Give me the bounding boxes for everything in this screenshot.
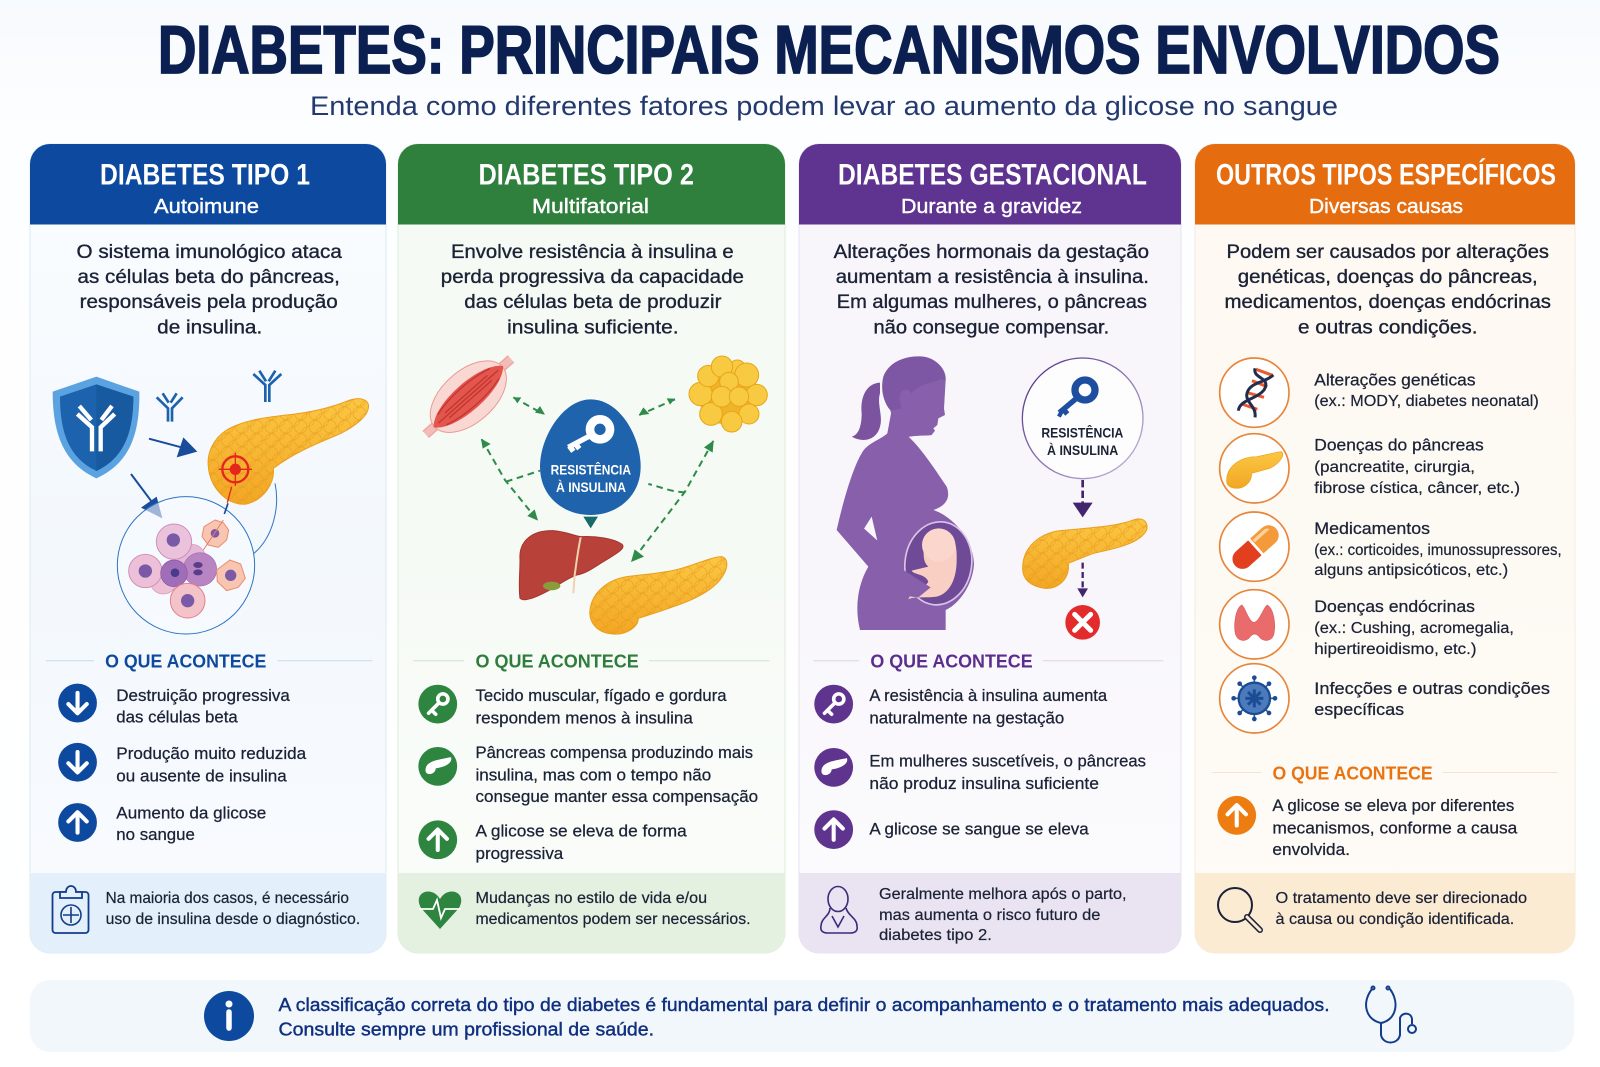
callout text: Consulte sempre um profissional de saúde. [279, 1019, 654, 1040]
item: pâncreas não produz: Em mulheres suscetíveis, o pâncreas [869, 752, 1146, 770]
callout text [279, 994, 1330, 1040]
illustration: autoimmune attack on pancreas [53, 371, 369, 634]
item: aumento da glicose: no sangue [116, 826, 195, 844]
icon: stethoscope [1366, 986, 1416, 1042]
item: pâncreas compensa: insulina, mas com o tempo não [476, 767, 711, 785]
header: gestacional: DIABETES GESTACIONAL [838, 158, 1147, 192]
description: tipo 2: das células beta de produzir [464, 291, 722, 313]
item text: medicamentos [1314, 520, 1562, 579]
footer: gestacional: Geralmente melhora após o parto, [879, 886, 1127, 903]
header: tipo 1: DIABETES TIPO 1 [100, 158, 310, 192]
illustration: pregnant woman and insulin resistance: À INSULINA [1047, 443, 1118, 458]
item: glicose se eleva: A glicose se eleva de forma [476, 823, 688, 841]
footer: gestacional: diabetes tipo 2. [879, 927, 992, 944]
header: tipo 2: DIABETES TIPO 2 [478, 158, 694, 192]
footer: tipo 1 [30, 873, 386, 953]
item: pâncreas compensa: consegue manter essa compensação [476, 788, 758, 806]
item text: doenças do pâncreas [1314, 437, 1520, 497]
section heading: o que acontece: O QUE ACONTECE [476, 650, 639, 671]
item: glicose se eleva: envolvida. [1272, 841, 1350, 859]
item: pâncreas não produz [814, 748, 1146, 793]
item text: medicamentos: alguns antipsicóticos, etc.) [1314, 562, 1508, 579]
description: outros tipos: genéticas, doenças do pâncreas, [1238, 266, 1538, 288]
item text: doenças do pâncreas: fibrose cística, câncer, etc.) [1314, 480, 1520, 497]
item: glicose se eleva: A glicose se sangue se eleva [869, 821, 1090, 839]
description: gestacional [834, 241, 1149, 339]
item: tecidos respondem menos [418, 685, 727, 727]
item: glicose se eleva [418, 820, 688, 863]
header: tipo 2 [398, 144, 785, 224]
description: outros tipos [1224, 241, 1551, 339]
header: outros tipos [1195, 144, 1575, 224]
item: produção reduzida: ou ausente de insulina [116, 768, 288, 786]
item: resistência aumenta: A resistência à insulina aumenta [869, 687, 1108, 705]
description: tipo 1 [77, 241, 342, 339]
icon: medicamentos [1220, 512, 1289, 581]
description: gestacional: não consegue compensar. [873, 317, 1109, 339]
subtitle: Entenda como diferentes fatores podem levar ao aumento da glicose no sangue [310, 91, 1338, 121]
panel: outros tipos específicos [1195, 144, 1575, 953]
item text: doenças endócrinas: hipertireoidismo, etc.) [1314, 641, 1477, 658]
item: tecidos respondem menos: respondem menos à insulina [476, 709, 694, 727]
item: aumento da glicose [58, 803, 266, 844]
item text: doenças endócrinas: (ex.: Cushing, acromegalia, [1314, 620, 1514, 637]
item: resistência aumenta [814, 685, 1108, 727]
header: gestacional [799, 144, 1181, 224]
item text: medicamentos: Medicamentos [1314, 520, 1430, 538]
item: destruição: das células beta [116, 708, 239, 726]
item text: doenças do pâncreas: (pancreatite, cirurgia, [1314, 459, 1475, 476]
description: outros tipos: Podem ser causados por alterações [1227, 241, 1549, 263]
section heading: o que acontece: O QUE ACONTECE [1272, 763, 1433, 784]
item: pâncreas compensa: Pâncreas compensa produzindo mais [476, 744, 753, 762]
item: pâncreas compensa [418, 744, 758, 806]
footer: outros tipos: O tratamento deve ser direcionado [1276, 890, 1527, 907]
description: tipo 2: Envolve resistência à insulina e [451, 241, 734, 263]
icon: vírus [1220, 664, 1289, 733]
panel: diabetes tipo 1 [30, 144, 386, 953]
footer: tipo 1: Na maioria dos casos, é necessário [106, 890, 349, 907]
callout text: A classificação correta do tipo de diabetes é fundamental para definir o acompanhamento e o tratamento mais adequados. [279, 994, 1330, 1015]
header: tipo 1 [30, 144, 386, 224]
item: glicose se eleva: mecanismos, conforme a causa [1272, 820, 1518, 838]
illustration: insulin resistance in organs [408, 339, 767, 634]
item text: alterações genéticas: Alterações genéticas [1314, 371, 1476, 389]
item text: infecções: Infecções e outras condições [1314, 680, 1550, 698]
description: tipo 1: responsáveis pela produção [80, 291, 338, 313]
description: outros tipos: e outras condições. [1298, 317, 1478, 339]
footer: gestacional [799, 873, 1181, 953]
description: gestacional: Em algumas mulheres, o pâncreas [837, 291, 1147, 313]
item: glicose se eleva: A glicose se eleva por diferentes [1272, 797, 1514, 815]
illustration: pregnant woman and insulin resistance [837, 356, 1147, 640]
panel: diabetes tipo 2 [398, 144, 785, 953]
description: gestacional: aumentam a resistência à insulina. [836, 266, 1149, 288]
item: produção reduzida [58, 743, 307, 786]
panel: diabetes gestacional [799, 144, 1181, 953]
bottom callout [30, 980, 1574, 1052]
description: gestacional: Alterações hormonais da gestação [834, 241, 1149, 263]
item: aumento da glicose: Aumento da glicose [116, 804, 266, 822]
item text: infecções [1314, 680, 1550, 719]
muscle [408, 339, 528, 454]
item text: infecções: específicas [1314, 701, 1404, 719]
item text: doenças endócrinas [1314, 598, 1514, 658]
item text: alterações genéticas [1314, 371, 1539, 410]
item: destruição: Destruição progressiva [116, 687, 291, 705]
description: tipo 1: as células beta do pâncreas, [78, 266, 340, 288]
icon: info [204, 991, 254, 1041]
header: tipo 2: Multifatorial [532, 196, 649, 218]
header: gestacional: Durante a gravidez [901, 196, 1082, 218]
section heading: o que acontece: O QUE ACONTECE [105, 650, 266, 671]
illustration: insulin resistance in organs: À INSULINA [556, 479, 626, 495]
item: destruição [58, 684, 291, 726]
description: tipo 2: perda progressiva da capacidade [441, 266, 744, 288]
illustration: insulin resistance in organs: RESISTÊNCIA [551, 460, 631, 477]
item: glicose se eleva [814, 810, 1090, 849]
item: glicose se eleva: progressiva [476, 845, 564, 863]
item: resistência aumenta: naturalmente na gestação [869, 709, 1064, 727]
description: tipo 1: O sistema imunológico ataca [77, 241, 342, 263]
footer: outros tipos: à causa ou condição identificada. [1276, 911, 1514, 928]
footer: tipo 2 [398, 873, 785, 953]
item text: alterações genéticas: (ex.: MODY, diabetes neonatal) [1314, 393, 1539, 410]
section heading: o que acontece: O QUE ACONTECE [870, 650, 1033, 671]
item: tecidos respondem menos: Tecido muscular, fígado e gordura [476, 687, 727, 705]
item: glicose se eleva [1217, 796, 1518, 859]
header: outros tipos: Diversas causas [1309, 196, 1463, 218]
description: tipo 1: de insulina. [157, 317, 262, 339]
item text: medicamentos: (ex.: corticoides, imunossupressores, [1314, 542, 1562, 559]
illustration: pregnant woman and insulin resistance: RESISTÊNCIA [1041, 425, 1123, 440]
description: outros tipos: medicamentos, doenças endócrinas [1224, 291, 1551, 313]
icon: pâncreas [1220, 434, 1289, 503]
footer: gestacional: mas aumenta o risco futuro de [879, 907, 1100, 924]
description: tipo 2: insulina suficiente. [507, 317, 679, 339]
footer: tipo 2: Mudanças no estilo de vida e/ou [476, 890, 707, 907]
footer: tipo 2: medicamentos podem ser necessários. [476, 911, 751, 928]
icon: tireoide [1220, 590, 1289, 659]
item text: doenças endócrinas: Doenças endócrinas [1314, 598, 1475, 616]
description: tipo 2 [441, 241, 744, 339]
item: produção reduzida: Produção muito reduzida [116, 745, 307, 763]
icon: dna [1220, 358, 1289, 427]
footer: tipo 1: uso de insulina desde o diagnóstico. [106, 911, 360, 928]
header: tipo 1: Autoimune [154, 196, 259, 218]
item text: doenças do pâncreas: Doenças do pâncreas [1314, 437, 1484, 455]
item: pâncreas não produz: não produz insulina suficiente [869, 775, 1099, 793]
footer: outros tipos [1195, 873, 1575, 953]
